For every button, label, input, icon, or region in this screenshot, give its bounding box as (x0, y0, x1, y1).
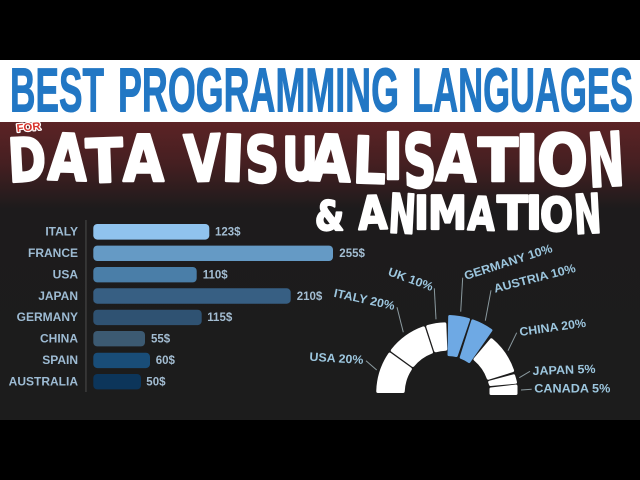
heading: data visualisation: I (515, 123, 539, 197)
heading: data visualisation: A (309, 122, 353, 198)
bar values: 50$ (146, 376, 166, 388)
bar values: 60$ (156, 355, 175, 367)
heading: and animation: I (526, 186, 542, 240)
label: for: FOR (16, 121, 41, 135)
bar labels: CHINA (40, 332, 78, 346)
bar values: 255$ (339, 248, 365, 260)
gauge chart: share by country (309, 241, 611, 396)
heading: data visualisation: L (352, 124, 387, 200)
heading: data visualisation: D (6, 125, 48, 197)
heading: data visualisation: S (402, 118, 438, 206)
heading: and animation: N (387, 182, 417, 247)
heading: and animation: A (467, 187, 496, 241)
bar values: 55$ (151, 334, 171, 346)
gauge labels: USA 20% (309, 350, 364, 367)
heading: data visualisation (6, 117, 626, 206)
bar labels: USA (53, 268, 78, 282)
bar values: 110$ (203, 270, 228, 282)
highlighted segments (449, 316, 491, 362)
leader lines (366, 278, 532, 390)
bar values: 115$ (207, 312, 233, 324)
title: best programming languages: BEST (10, 56, 104, 125)
title: best programming languages: PROGRAMMING (118, 56, 399, 125)
gauge segments (378, 324, 516, 394)
heading: data visualisation: T (85, 126, 124, 198)
heading: and animation (315, 182, 603, 247)
heading: data visualisation: V (183, 122, 223, 198)
heading: data visualisation: S (244, 123, 280, 199)
bar labels: AUSTRALIA (9, 374, 78, 388)
heading: data visualisation: A (123, 123, 164, 197)
heading: and animation: M (428, 186, 467, 240)
bar labels: JAPAN (38, 289, 78, 303)
bars (93, 224, 333, 389)
gauge labels (309, 241, 611, 396)
gauge labels: ITALY 20% (333, 286, 397, 313)
heading: and animation: T (497, 186, 529, 240)
bar chart: values by country (9, 220, 365, 392)
bar labels: GERMANY (17, 310, 78, 324)
gauge labels: CANADA 5% (534, 382, 611, 396)
bar labels: FRANCE (28, 246, 78, 260)
bar values (146, 226, 365, 388)
heading: and animation: O (540, 188, 573, 242)
bar labels (9, 224, 78, 388)
heading: data visualisation: A (435, 122, 479, 198)
gauge labels: AUSTRIA 10% (492, 261, 577, 296)
heading: data visualisation: U (282, 125, 318, 195)
heading: data visualisation: O (537, 120, 588, 202)
gauge labels: CHINA 20% (518, 316, 587, 339)
gauge labels: JAPAN 5% (532, 362, 596, 378)
heading: and animation: & (315, 194, 344, 240)
heading: data visualisation: T (478, 126, 518, 196)
bar values: 210$ (297, 291, 323, 303)
heading: and animation: A (357, 185, 388, 240)
bar values: 123$ (215, 226, 241, 238)
heading: data visualisation: I (383, 121, 403, 195)
bar labels: ITALY (45, 224, 78, 238)
heading: and animation: I (414, 186, 429, 240)
heading: and animation: N (573, 182, 603, 247)
gauge labels: GERMANY 10% (462, 241, 554, 283)
heading: data visualisation: I (220, 123, 246, 197)
heading: data visualisation: A (47, 121, 89, 197)
gauge labels: UK 10% (386, 265, 436, 294)
bar labels: SPAIN (42, 353, 78, 367)
